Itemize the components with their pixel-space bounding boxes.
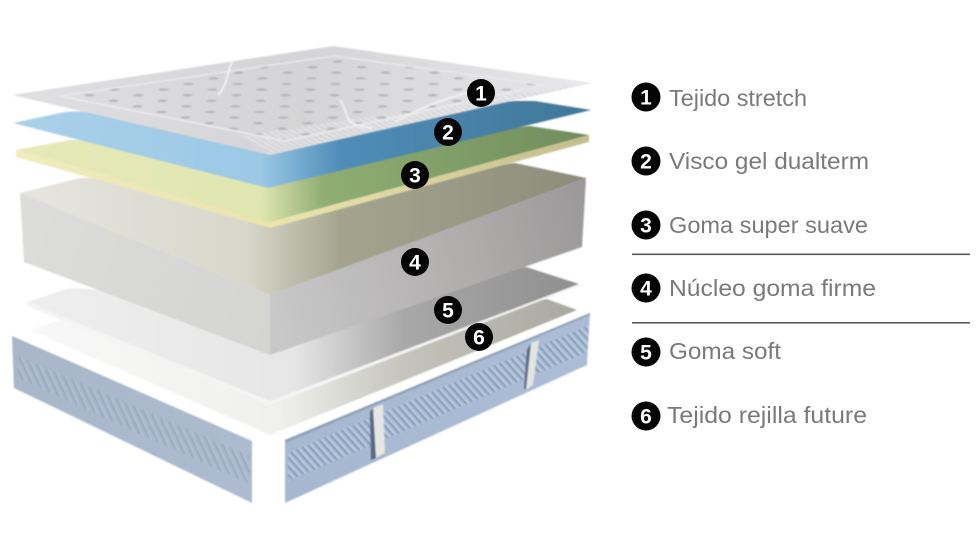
marker 1: 1 (475, 82, 487, 106)
legend item 1 (632, 82, 807, 112)
layer 3 super soft foam (16, 126, 589, 228)
legend item 5: Goma soft (669, 338, 782, 364)
legend item 6: 6 (640, 406, 652, 428)
marker 4: 4 (409, 252, 421, 274)
layer 4 firm core block (20, 163, 586, 355)
marker 6 (465, 323, 493, 351)
layer 2 visco gel (13, 100, 591, 188)
marker 4 (401, 248, 429, 276)
layer 6 mesh fabric (30, 299, 577, 435)
legend item 2: Visco gel dualterm (669, 148, 869, 174)
legend item 3: Goma super suave (669, 212, 868, 238)
layer 1 stretch fabric (12, 46, 592, 155)
marker 1 (467, 79, 495, 107)
legend item 3: 3 (640, 214, 652, 238)
exploded mattress illustration (12, 46, 592, 503)
legend item 5 (632, 338, 782, 366)
base left side panel (12, 336, 252, 503)
marker 2 (434, 118, 462, 146)
legend item 4: 4 (640, 278, 652, 300)
marker 2: 2 (442, 122, 454, 144)
marker 3 (401, 161, 429, 189)
marker 3: 3 (409, 164, 421, 188)
marker 5 (434, 296, 462, 324)
layer 5 soft foam (27, 266, 579, 405)
base right side panel (285, 313, 590, 503)
base fabric straps (370, 340, 539, 460)
legend item 5: 5 (640, 342, 652, 364)
legend item 2: 2 (640, 150, 652, 174)
legend item 1: 1 (640, 86, 652, 110)
legend item 1: Tejido stretch (669, 85, 807, 111)
legend (632, 82, 970, 430)
marker 5: 5 (442, 300, 454, 322)
legend item 6: Tejido rejilla future (667, 402, 867, 428)
marker 6: 6 (473, 326, 485, 350)
legend item 4: Núcleo goma firme (669, 275, 876, 301)
